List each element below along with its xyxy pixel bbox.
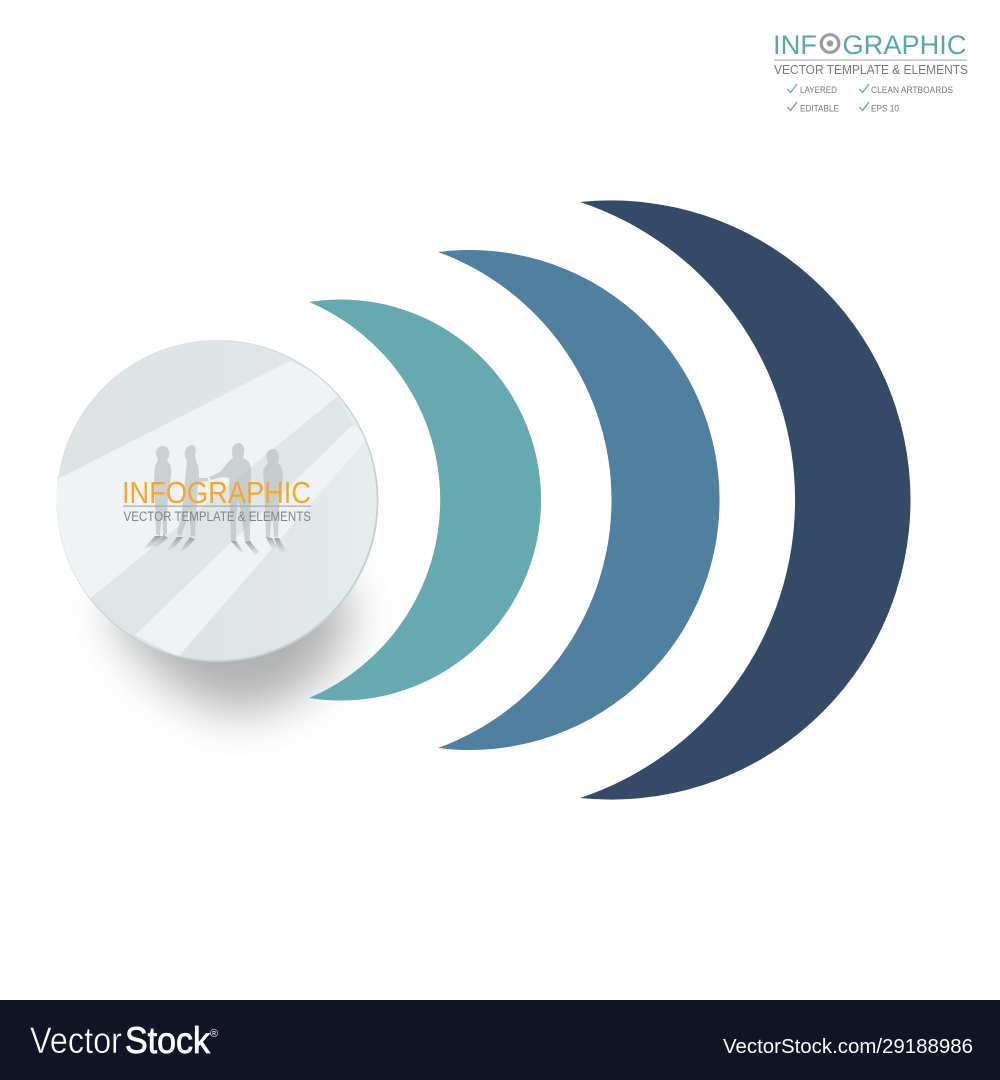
icon: check editable [788, 102, 797, 110]
disc subtitle: VECTOR TEMPLATE & ELEMENTS [124, 509, 311, 524]
logo word start: INF [773, 30, 817, 60]
person 1 [154, 446, 171, 536]
panel: central disc [56, 340, 378, 662]
crescent: blue [438, 250, 720, 750]
icon: feet shadows [143, 535, 286, 555]
footer logo bold: Stock [125, 1020, 210, 1061]
logo rule [774, 60, 967, 61]
disc title rule [123, 506, 311, 507]
icon: logo ring [821, 35, 839, 52]
disc title: INFOGRAPHIC [122, 476, 311, 510]
icon: check eps [860, 102, 869, 110]
icon: check layered [788, 84, 797, 92]
crescent: navy [580, 200, 911, 800]
disc rim [56, 340, 378, 662]
disc face with light bands [56, 340, 377, 660]
disc drop shadow [115, 570, 348, 712]
footer registered mark: ® [210, 1028, 218, 1040]
icon: check clean artboards [860, 84, 869, 92]
footer bar [0, 1000, 1000, 1080]
logo word end: GRAPHIC [842, 30, 966, 60]
footer logo: Vector [30, 1020, 122, 1061]
person 3 [209, 443, 251, 542]
footer url: VectorStock.com/29188986 [723, 1036, 973, 1058]
label: editable: EDITABLE [800, 104, 839, 114]
top-right logo [773, 30, 968, 114]
icon: business people silhouettes [154, 443, 283, 542]
label: layered: LAYERED [800, 85, 837, 95]
label: clean artboards: CLEAN ARTBOARDS [871, 85, 953, 95]
person 4 [263, 449, 283, 537]
person 2 [177, 445, 208, 536]
logo subtitle: VECTOR TEMPLATE & ELEMENTS [774, 62, 968, 77]
label: eps: EPS 10 [871, 104, 899, 114]
crescent: teal [309, 300, 541, 700]
